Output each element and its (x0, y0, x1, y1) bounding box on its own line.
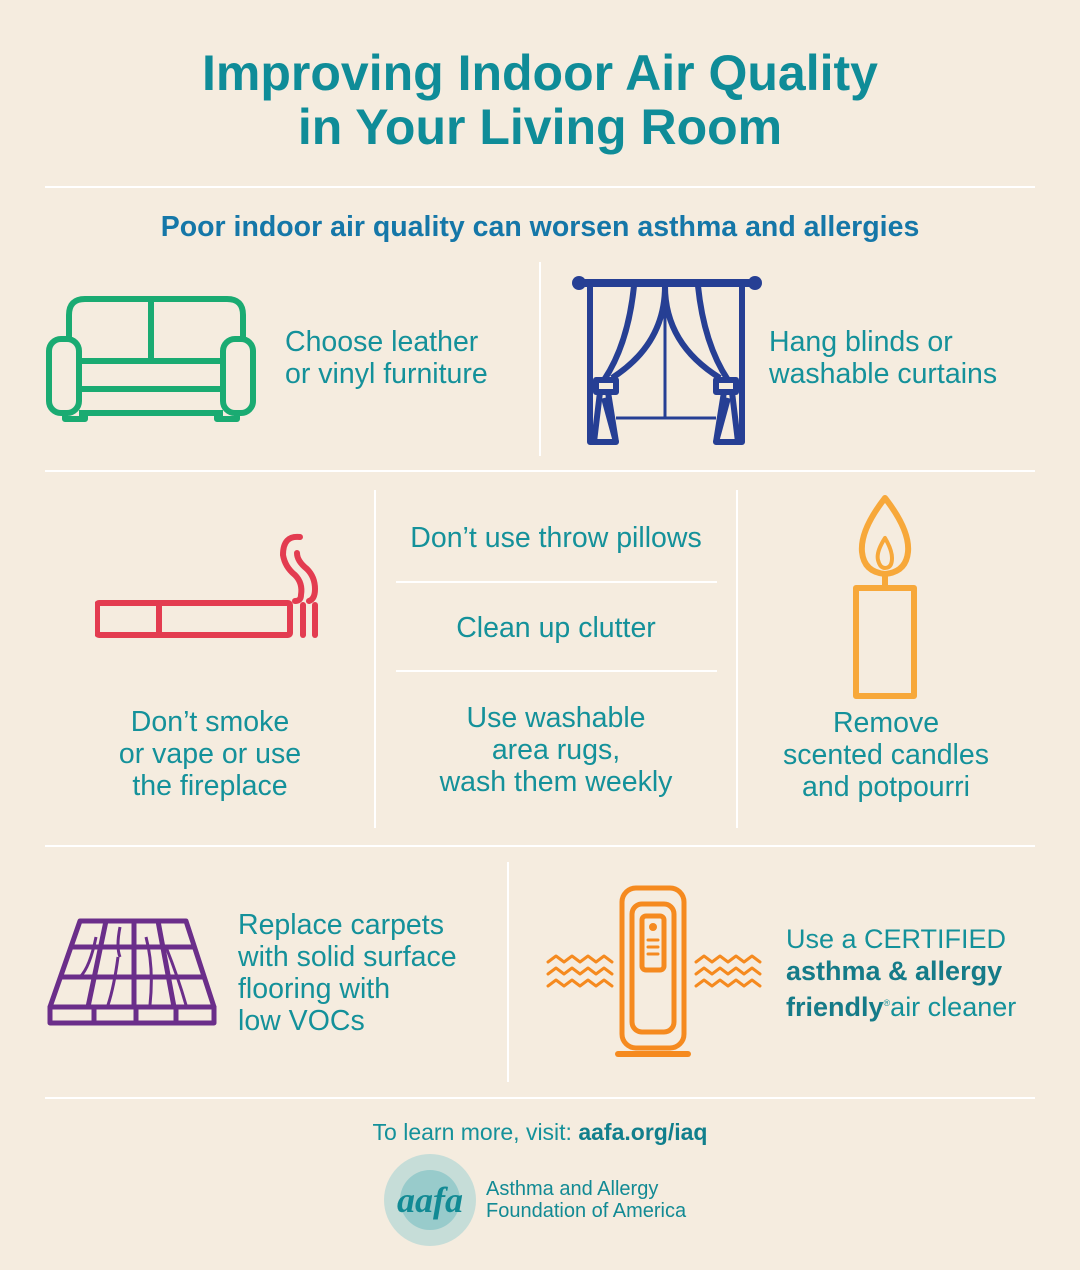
text: air cleaner (786, 924, 1016, 1022)
text: pillows: Don’t use throw pillows (410, 522, 702, 554)
text: rugs: area rugs, (492, 734, 620, 766)
icon: curtains (572, 276, 762, 445)
text: flooring: with solid surface (238, 941, 457, 973)
icon: candle (853, 495, 917, 699)
text: air cleaner: Use a CERTIFIED (786, 924, 1006, 954)
text: clutter: Clean up clutter (456, 612, 656, 644)
text: air cleaner: asthma & allergy (786, 956, 1002, 986)
logo text: Foundation of America (486, 1200, 686, 1222)
text: curtains: washable curtains (769, 358, 997, 390)
logo text: Asthma and Allergy (486, 1178, 658, 1200)
icon: cigarette (95, 534, 318, 638)
text: furniture (285, 326, 488, 390)
logo mark: aafa (397, 1180, 463, 1220)
icon: sofa (46, 296, 256, 422)
text: curtains (769, 326, 997, 390)
footer link: To learn more, visit: aafa.org/iaq (373, 1119, 707, 1145)
text: curtains: Hang blinds or (769, 326, 953, 358)
text: flooring: Replace carpets (238, 909, 444, 941)
text: flooring (238, 909, 457, 1037)
title: in Your Living Room (298, 99, 782, 155)
text: candles: and potpourri (802, 771, 970, 803)
text: smoke: the fireplace (132, 770, 288, 802)
text: candles (783, 707, 989, 803)
title (202, 45, 878, 155)
text: candles: Remove (833, 707, 939, 739)
icon: flooring (48, 918, 216, 1026)
text: rugs: Use washable (466, 702, 646, 734)
icon: air cleaner (546, 886, 762, 1057)
text: smoke: or vape or use (119, 738, 301, 770)
logo text (486, 1178, 686, 1222)
text: rugs (440, 702, 672, 798)
text: furniture: or vinyl furniture (285, 358, 488, 390)
text: air cleaner: friendly®air cleaner (786, 992, 1016, 1022)
text: furniture: Choose leather (285, 326, 478, 358)
logo mark (384, 1154, 476, 1246)
text: smoke: Don’t smoke (131, 706, 289, 738)
text: rugs: wash them weekly (440, 766, 672, 798)
subtitle: Poor indoor air quality can worsen asthma and allergies (161, 211, 919, 243)
text: flooring: flooring with (238, 973, 390, 1005)
title: Improving Indoor Air Quality (202, 45, 878, 101)
logo (384, 1154, 686, 1246)
text: candles: scented candles (783, 739, 989, 771)
text: smoke (119, 706, 301, 802)
text: flooring: low VOCs (238, 1005, 365, 1037)
